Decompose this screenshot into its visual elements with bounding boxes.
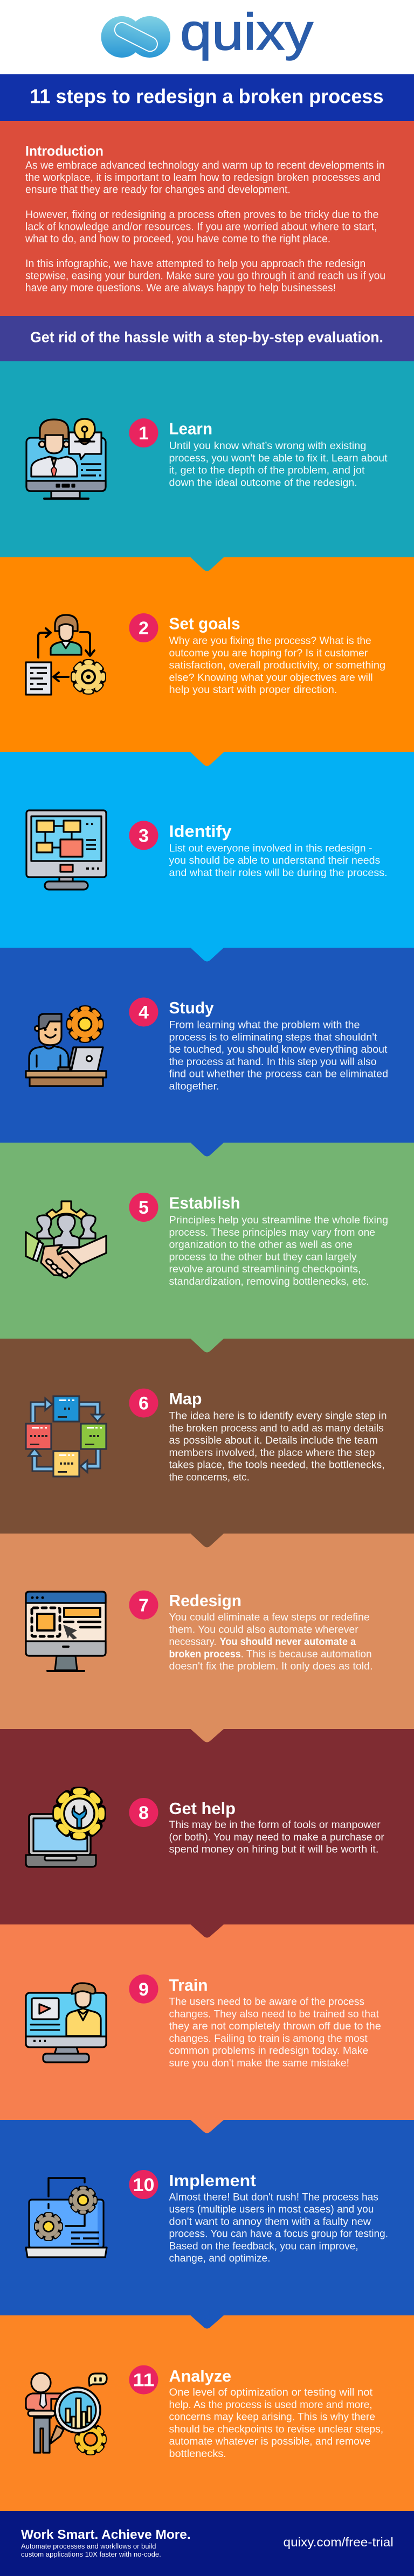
footer slogan: Work Smart. Achieve More. (21, 2528, 191, 2542)
text: set goals: Why are you fixing the process? What is the (169, 635, 371, 647)
text: map: The idea here is to identify every single step in (169, 1411, 387, 1422)
footer description (21, 2542, 161, 2558)
subtitle banner (0, 316, 414, 361)
heading: implement: Implement (169, 2171, 256, 2190)
text: map: as possible about it. Details include the team (169, 1435, 378, 1446)
arrow: step 8 to step 9 (191, 1924, 224, 1937)
arrow: step 5 to step 6 (191, 1339, 224, 1353)
introduction text: stepwise, easing your burden. Make sure you go through it and reach us if you (25, 270, 385, 282)
introduction text: the workplace, it is important to learn how to redesign broken processes and (25, 172, 381, 184)
text: analyze: help. As the process is used more and more, (169, 2399, 372, 2411)
text: implement (169, 2192, 388, 2264)
panel: step 9 train (0, 1924, 414, 2120)
text: learn: process, you won't be able to fix it. Learn about (169, 453, 388, 464)
text: analyze: should be checkpoints to revise unclear steps, (169, 2424, 383, 2435)
text: redesign: broken process (169, 1649, 241, 1660)
footer description: Automate processes and workflows or build (21, 2542, 156, 2550)
panel: step 5 establish (0, 1143, 414, 1339)
text: redesign: . This is because automation (241, 1649, 372, 1660)
step number 1: 1 (139, 423, 149, 444)
step number 6 (129, 1389, 158, 1418)
header: quixy logo (0, 0, 414, 74)
heading: redesign: Redesign (169, 1591, 242, 1610)
subtitle: Get rid of the hassle with a step-by-step evaluation. (30, 328, 383, 346)
step number 4 (129, 997, 158, 1026)
text: study: altogether. (169, 1081, 219, 1092)
footer description: custom applications 10X faster with no-code. (21, 2550, 161, 2558)
text: establish: organization to the other as well as one (169, 1240, 353, 1250)
text: establish (169, 1215, 388, 1287)
text: train: The users need to be aware of the process (169, 1997, 364, 2008)
heading: train: Train (169, 1976, 208, 1994)
text: map: takes place, the tools needed, the bottlenecks, (169, 1460, 385, 1471)
panel: introduction (0, 121, 414, 316)
heading: establish: Establish (169, 1193, 240, 1213)
step number 5 (129, 1193, 158, 1222)
text: train: common problems in redesign today. Make (169, 2046, 368, 2057)
text: analyze: automate whatever is possible, and remove (169, 2436, 370, 2447)
text: analyze: bottlenecks. (169, 2448, 226, 2460)
step number 10: 10 (133, 2175, 154, 2195)
introduction text: lack of knowledge and/or resources. If you are worried about where to start, (25, 221, 377, 233)
heading: study: Study (169, 998, 214, 1017)
text: learn: it, get to the depth of the problem, and jot (169, 465, 365, 476)
step number 9 (129, 1975, 158, 2004)
text: study: be touched, you should know everything about (169, 1044, 388, 1055)
text: redesign: necessary. (169, 1636, 217, 1648)
panel: step 7 redesign (0, 1534, 414, 1729)
logo mark (101, 16, 170, 58)
text: redesign: You should never automate a (220, 1636, 356, 1648)
text: implement: don't want to annoy them with a faulty new (169, 2216, 371, 2228)
text: establish: revolve around streamlining checkpoints, (169, 1264, 361, 1275)
icon: analyst with magnifier and chart (26, 2373, 107, 2453)
text: implement: change, and optimize. (169, 2253, 271, 2264)
text: redesign: doesn't fix the problem. It only does as told. (169, 1661, 373, 1672)
text: get help: This may be in the form of tools or manpower (169, 1819, 381, 1831)
heading: set goals: Set goals (169, 614, 240, 633)
step number 3 (129, 821, 158, 850)
text: redesign: them. You could also automate wherever (169, 1624, 358, 1635)
heading: learn: Learn (169, 419, 212, 438)
text: establish: Principles help you streamline the whole fixing (169, 1215, 388, 1226)
text: study: the process at hand. In this step you will also (169, 1056, 376, 1068)
text: establish: process. These principles may vary from one (169, 1227, 375, 1238)
text: identify: and what their roles will be during the process. (169, 867, 387, 879)
icon: training video on monitor (26, 1983, 106, 2062)
text: learn: Until you know what’s wrong with existing (169, 440, 366, 452)
text: identify: you should be able to understand their needs (169, 855, 380, 866)
text: set goals: outcome you are hoping for? Is it customer (169, 648, 368, 659)
text: train: changes. They also need to be trained so that (169, 2008, 380, 2020)
text: study: find out whether the process can be eliminated (169, 1068, 388, 1080)
icon: laptop with gears (26, 2178, 107, 2257)
step number 8: 8 (139, 1803, 149, 1823)
icon: person on monitor with lightbulb (26, 419, 106, 499)
text: analyze: concerns may keep arising. This is why there (169, 2411, 375, 2423)
text: get help: spend money on hiring but it will be worth it. (169, 1844, 378, 1856)
text: map (169, 1411, 387, 1483)
step number 3: 3 (139, 825, 149, 846)
step number 9: 9 (139, 1979, 149, 2000)
step number 11: 11 (133, 2370, 154, 2391)
text: implement: Based on the feedback, you can improve, (169, 2241, 358, 2252)
introduction text: what to do, and how to proceed, you have come to the right place. (25, 233, 330, 245)
arrow: step 7 to step 8 (191, 1729, 224, 1742)
arrow: step 3 to step 4 (191, 948, 224, 962)
panel: step 8 get help (0, 1729, 414, 1924)
text: implement: users (multiple users in most cases) and you (169, 2204, 374, 2215)
introduction text: ensure that they are ready for changes and development. (25, 184, 291, 196)
step number 5: 5 (139, 1198, 149, 1218)
icon: process map cycle (26, 1396, 106, 1476)
text: study: From learning what the problem with the (169, 1020, 360, 1031)
text: set goals: help you start with proper direction. (169, 684, 337, 696)
icon: man at laptop with gear (26, 1008, 106, 1086)
text: implement: process. You can have a focus group for testing. (169, 2229, 388, 2240)
step number 8 (129, 1798, 158, 1827)
text: analyze: One level of optimization or testing will not (169, 2387, 373, 2398)
step number 6: 6 (139, 1394, 149, 1414)
arrow: step 6 to step 7 (191, 1534, 224, 1548)
panel: step 11 analyze (0, 2315, 414, 2511)
step number 11 (129, 2365, 158, 2395)
icon: laptop with wrench gear (26, 1791, 102, 1867)
text: train: sure you don't make the same mistake! (169, 2057, 349, 2069)
text: study: process is to eliminating steps that shouldn't (169, 1032, 377, 1043)
step number 2: 2 (139, 618, 149, 639)
arrow: step 4 to step 5 (191, 1143, 224, 1157)
text: train: they are not completely thrown off due to the (169, 2021, 381, 2032)
arrow: step 9 to step 10 (191, 2120, 224, 2133)
title banner (0, 74, 414, 121)
text: map: the concerns, etc. (169, 1472, 250, 1483)
arrow: step 1 to step 2 (191, 557, 224, 571)
introduction text: However, fixing or redesigning a process often proves to be tricky due to the (25, 209, 378, 221)
logo wordmark: quixy (180, 3, 313, 61)
text: identify (169, 843, 387, 879)
panel: step 6 map (0, 1339, 414, 1534)
step number 7: 7 (139, 1595, 149, 1616)
text: map: members involved, the place where the step (169, 1447, 375, 1459)
text: learn (169, 440, 388, 488)
heading: map: Map (169, 1389, 202, 1408)
introduction text: have any more questions. We are always happy to help businesses! (25, 282, 336, 294)
panel: step 4 study (0, 948, 414, 1143)
arrow: step 2 to step 3 (191, 752, 224, 766)
text: establish: standardization, removing bottlenecks, etc. (169, 1276, 369, 1287)
text: establish: process to the other but they can largely (169, 1251, 357, 1263)
panel: step 3 identify (0, 752, 414, 948)
icon: goal cycle with person, gear and document (26, 615, 104, 695)
title: 11 steps to redesign a broken process (30, 85, 384, 108)
icon: handshake with team and gear (26, 1201, 106, 1279)
introduction text (25, 159, 385, 294)
text: learn: down the ideal outcome of the redesign. (169, 477, 357, 488)
introduction text: As we embrace advanced technology and warm up to recent developments in (25, 159, 385, 171)
introduction text: In this infographic, we have attempted to help you approach the redesign (25, 258, 365, 270)
step number 10 (129, 2170, 158, 2199)
text: train: changes. Failing to train is among the most (169, 2033, 368, 2045)
text: set goals: satisfaction, overall productivity, or something (169, 660, 385, 671)
step number 7 (129, 1591, 158, 1620)
arrow: step 10 to step 11 (191, 2315, 224, 2328)
text: get help (169, 1819, 384, 1856)
text: redesign (169, 1612, 373, 1672)
panel: step 10 implement (0, 2120, 414, 2315)
text: set goals (169, 635, 385, 696)
text: study (169, 1020, 388, 1092)
icon: monitor with flowchart (26, 810, 106, 890)
footer (0, 2511, 414, 2576)
panel: step 2 set goals (0, 557, 414, 752)
introduction heading: Introduction (25, 143, 104, 159)
text: redesign: You could eliminate a few steps or redefine (169, 1612, 370, 1623)
text: get help: (or both). You may need to make a purchase or (169, 1832, 384, 1843)
heading: get help: Get help (169, 1799, 236, 1818)
heading: analyze: Analyze (169, 2367, 231, 2385)
step number 1 (129, 418, 158, 447)
text: analyze (169, 2387, 383, 2460)
text: set goals: else? Knowing what your objectives are will (169, 672, 373, 683)
text: implement: Almost there! But don't rush! The process has (169, 2192, 378, 2203)
text: train (169, 1997, 381, 2069)
footer link: quixy.com/free-trial (284, 2535, 394, 2549)
text: identify: List out everyone involved in this redesign - (169, 843, 372, 854)
panel: step 1 learn (0, 361, 414, 557)
step number 4: 4 (139, 1003, 149, 1023)
icon: redesign monitor with cursor (26, 1592, 106, 1671)
heading: identify: Identify (169, 822, 232, 841)
text: map: the broken process and to add as many details (169, 1423, 384, 1434)
step number 2 (129, 613, 158, 642)
